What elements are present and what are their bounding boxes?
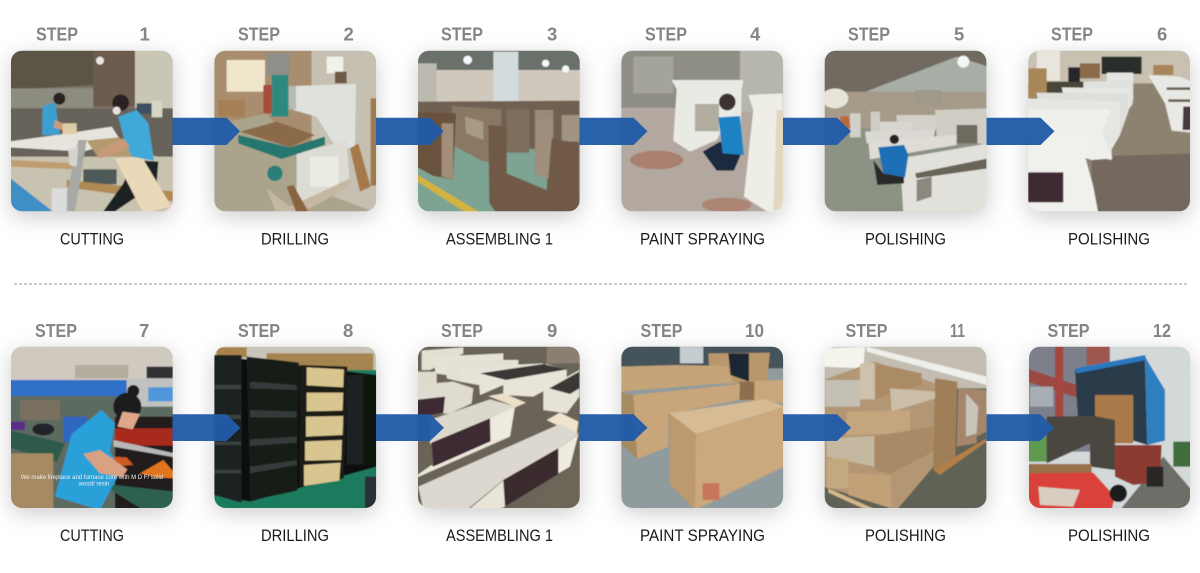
step 10 label: PAINT SPRAYING (640, 527, 765, 545)
step 6 heading: STEP (1051, 24, 1093, 45)
step 4 heading: STEP (645, 24, 687, 45)
step 2 (210, 24, 380, 248)
step 4 label: PAINT SPRAYING (640, 230, 765, 248)
arrow 3 to 4 (580, 118, 648, 145)
step 7 heading (35, 320, 149, 341)
arrow 7 to 8 (172, 414, 240, 441)
step 6 label: POLISHING (1068, 230, 1150, 248)
step 9 label: ASSEMBLING 1 (446, 527, 553, 545)
step 3 heading: STEP (441, 24, 483, 45)
step 1 heading: 1 (140, 24, 150, 45)
step 12 (1027, 320, 1193, 545)
step 5 heading (848, 24, 964, 45)
step 6 heading (1051, 24, 1167, 45)
step 10 (618, 320, 785, 545)
arrow 2 to 3 (376, 118, 444, 145)
photo: polishing row (1025, 48, 1192, 213)
step 5 heading: 5 (954, 24, 964, 45)
arrows row 1 (172, 118, 1054, 145)
photo: cutting (8, 48, 175, 213)
step 12 heading: 12 (1153, 320, 1171, 341)
step 2 label: DRILLING (261, 230, 329, 248)
photo: drilling lit cabinets (210, 345, 380, 510)
caption overlaid on photo: wood/ resin (78, 482, 109, 488)
step 7 heading: STEP (35, 320, 77, 341)
arrow 10 to 11 (783, 414, 851, 441)
photo: polishing (822, 48, 988, 213)
step 6 (1025, 24, 1192, 248)
step 8 label: DRILLING (261, 527, 329, 545)
caption overlaid on photo: We make fireplace and furnace core with M D F/ solid (21, 475, 163, 481)
caption overlaid on photo (20, 474, 163, 486)
step 3 (415, 24, 582, 248)
step 12 heading (1048, 320, 1171, 341)
arrow 4 to 5 (783, 118, 851, 145)
photo: marble tv stands (415, 345, 582, 512)
step 11 heading: STEP (846, 320, 888, 341)
step 5 heading: STEP (848, 24, 890, 45)
arrow 9 to 10 (580, 414, 648, 441)
step 8 (210, 320, 380, 545)
photo: assembling (415, 48, 582, 213)
step 5 label: POLISHING (865, 230, 946, 248)
step 8 heading: 8 (343, 320, 353, 341)
step 11 (822, 320, 988, 545)
step 4 heading: 4 (750, 24, 761, 45)
step 9 heading (441, 320, 557, 341)
step 10 heading: 10 (745, 320, 764, 341)
step 1 heading: STEP (36, 24, 78, 45)
step 12 label: POLISHING (1068, 527, 1150, 545)
step 2 heading: 2 (344, 24, 354, 45)
section divider (14, 283, 1187, 285)
photo: container loading (1027, 345, 1193, 510)
photo: drilling (210, 48, 380, 213)
step 7 label: CUTTING (60, 527, 124, 545)
arrow 8 to 9 (376, 414, 444, 441)
step 1 label: CUTTING (60, 230, 124, 248)
step 1 heading (36, 24, 150, 45)
photo: wrapped pallets (822, 345, 988, 510)
step 3 label: ASSEMBLING 1 (446, 230, 553, 248)
step 3 heading (441, 24, 557, 45)
arrow 1 to 2 (172, 118, 240, 145)
step 3 heading: 3 (547, 24, 557, 45)
step 4 heading (645, 24, 761, 45)
step 8 heading (238, 320, 353, 341)
step 11 heading: 11 (950, 320, 965, 341)
step 11 label: POLISHING (865, 527, 946, 545)
step 10 heading (640, 320, 764, 341)
step 12 heading: STEP (1048, 320, 1090, 341)
step 5 (822, 24, 988, 248)
step 8 heading: STEP (238, 320, 280, 341)
step 9 heading: 9 (547, 320, 557, 341)
photo: cutting core (8, 345, 175, 510)
arrow 11 to 12 (986, 414, 1054, 441)
step 9 (415, 320, 582, 545)
photo: packed cartons (618, 345, 785, 510)
arrows row 2 (172, 414, 1054, 441)
step 2 heading (238, 24, 354, 45)
card shadows (11, 56, 1190, 513)
arrow 5 to 6 (986, 118, 1054, 145)
step 11 heading (846, 320, 965, 341)
step 7 heading: 7 (139, 320, 149, 341)
step 10 heading: STEP (640, 320, 682, 341)
photo: paint spraying (618, 48, 785, 213)
step 9 heading: STEP (441, 320, 483, 341)
step 1 (8, 24, 175, 248)
step 2 heading: STEP (238, 24, 280, 45)
step 6 heading: 6 (1157, 24, 1167, 45)
step 4 (618, 24, 785, 248)
step 7 (8, 320, 175, 545)
